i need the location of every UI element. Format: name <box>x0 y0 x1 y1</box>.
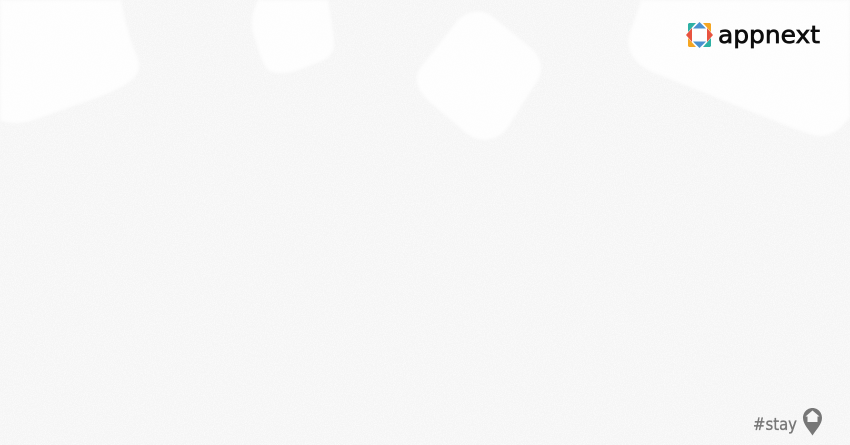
logo: appnext <box>686 21 820 49</box>
logo wordmark: appnext <box>718 21 820 49</box>
icon: house location pin <box>803 408 822 436</box>
hashtag: #stay: #stay <box>753 415 797 435</box>
background blobs <box>0 0 850 140</box>
icon: logo mark <box>686 22 713 48</box>
